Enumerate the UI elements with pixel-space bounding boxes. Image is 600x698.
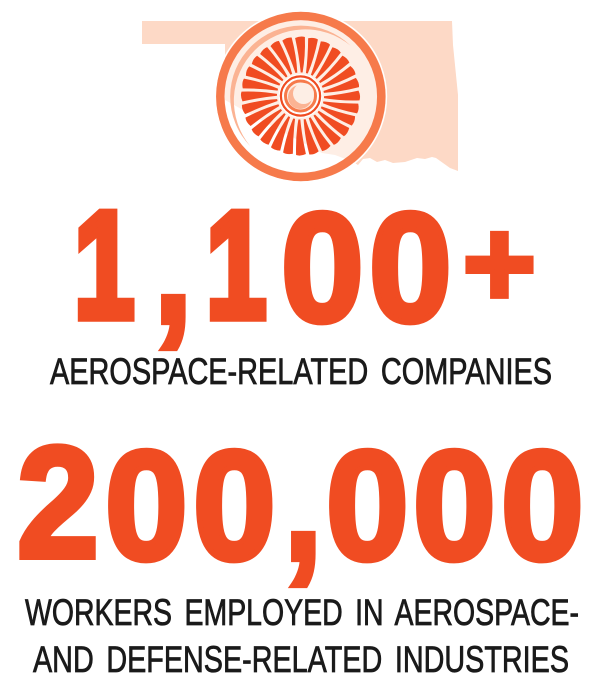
stat number: 200,000: 2 — [17, 415, 99, 591]
stat number: 200,000: 0 — [326, 419, 409, 593]
map: Oklahoma silhouette — [142, 21, 458, 171]
stat number: 200,000 — [17, 407, 584, 595]
stat number: 1,100+ — [74, 170, 536, 358]
stat number: 1,100+: , — [154, 170, 192, 358]
stat number: 200,000: 0 — [501, 419, 584, 593]
stat number: 1,100+: 1 — [206, 181, 267, 351]
stat number: 200,000: 0 — [105, 419, 188, 593]
stat number: 1,100+: + — [462, 193, 536, 334]
stat number: 200,000: 0 — [413, 419, 496, 593]
turbine hub — [278, 74, 322, 118]
turbine blades — [241, 36, 360, 156]
engine inner crescent — [230, 26, 351, 146]
icon: jet engine turbine — [215, 11, 386, 182]
stat number: 1,100+: 0 — [369, 181, 452, 355]
stat number: 1,100+: 1 — [74, 181, 135, 351]
engine ring — [220, 16, 381, 177]
stat number: 1,100+: 0 — [281, 181, 364, 355]
stat number: 200,000: , — [284, 407, 322, 595]
stat number: 200,000: 0 — [193, 419, 276, 593]
